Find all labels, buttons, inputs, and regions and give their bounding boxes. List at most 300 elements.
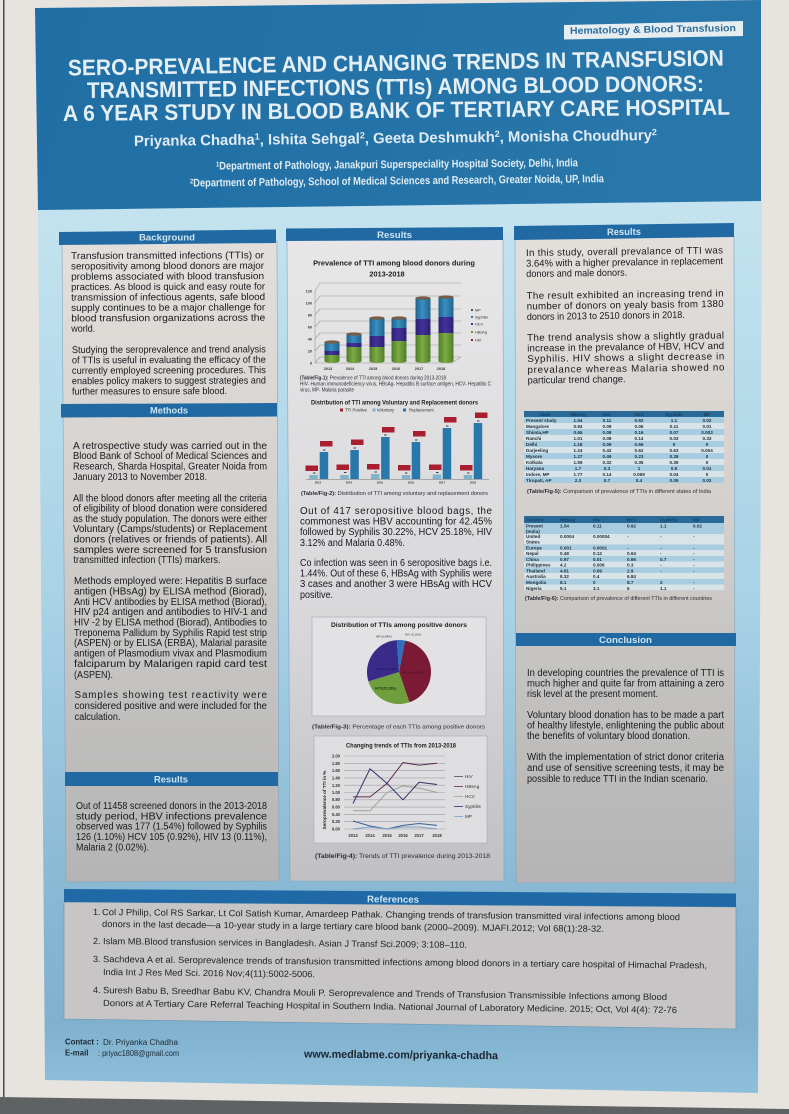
authors: 2 <box>495 129 500 139</box>
value ticks <box>313 420 480 474</box>
methods text: Anti HCV antibodies by ELISA method (Biorad), <box>74 597 267 608</box>
table 1 state names: Shimla,HP <box>526 430 549 435</box>
conclusion text: possible to reduce TTI in the Indian scenario. <box>527 774 708 785</box>
table 1 values: 0.63 <box>670 448 679 453</box>
table 2 rows: - <box>693 568 695 573</box>
table 1 state names <box>526 418 557 483</box>
y axis labels: 60 <box>308 326 312 330</box>
legend <box>340 408 435 413</box>
methods text: (ASPEN). <box>74 670 113 681</box>
table 2 rows: 2 <box>660 580 663 585</box>
table 2 rows: - <box>660 534 662 539</box>
contact details <box>65 1038 179 1058</box>
methods text: falciparum by Malarigen rapid card test <box>74 659 267 670</box>
pie labels <box>375 632 424 690</box>
reference list: 1. <box>93 907 101 917</box>
title: TRANSMITTED INFECTIONS (TTIs) AMONG BLOOD DONORS: <box>87 71 704 103</box>
table 2 rows: 0.11 <box>593 524 602 528</box>
results text left: Out of 11458 screened donors in the 2013-2018 <box>76 801 267 812</box>
legend: Replacement <box>409 408 435 413</box>
table 1 values: 1.54 <box>574 418 583 423</box>
results text left: 126 (1.10%) HCV 105 (0.92%), HIV 13 (0.11%), <box>76 832 267 843</box>
background text: currently employed screening procedures. This <box>72 365 266 377</box>
table 1 values: 0.35 <box>635 460 644 465</box>
table 1 values: 1.59 <box>574 460 583 465</box>
background text: seropositivity among blood donors are major <box>71 261 265 272</box>
results text left <box>76 801 268 853</box>
table 1 values: 0.28 <box>670 454 679 459</box>
table 2 rows: 3.1 <box>593 586 600 591</box>
caption: figure 6: (Table/Fig-6): Comparison of prevalence of different TTIs in different countries <box>525 596 712 602</box>
table 2 rows: Thailand <box>526 568 545 573</box>
chart: stacked prevalence: 2013-2018 <box>369 270 405 278</box>
middle text: 1.44%. Out of these 6, HBsAg with Syphilis were <box>300 568 492 580</box>
table 1 state names: Mangalore <box>526 424 549 429</box>
red value labels <box>306 412 488 471</box>
table 2 header row: HCV <box>627 518 638 522</box>
methods text: donors (relatives or friends of patients). All <box>74 534 267 546</box>
conclusion text: and use of sensitive screening tests, it may be <box>527 763 725 774</box>
methods text: Voluntary (Camps/students) or Replacement <box>73 524 267 535</box>
table 2 rows <box>526 524 702 591</box>
table 1 values: 0.94 <box>574 424 583 429</box>
year labels: 2013 <box>315 480 322 484</box>
table 2 rows: 8.1 <box>560 580 567 585</box>
pie labels: HBsAg (42.45%) <box>402 670 424 674</box>
table 2 rows: States <box>526 540 540 544</box>
results text right: The result exhibited an increasing trend in <box>526 288 724 302</box>
table 2 rows: 0.66 <box>627 557 636 562</box>
caption: figure 5: (Table/Fig-5): Comparison of prevalence of TTIs in different states of India <box>527 489 712 495</box>
background text: practices. As blood is quick and easy route for <box>71 282 266 293</box>
table 2 rows: 8.7 <box>627 580 634 585</box>
background text: enables policy makers to suggest strategies and <box>72 376 266 387</box>
middle text: followed by Syphilis 30.22%, HCV 25.18%, HIV <box>300 527 492 538</box>
line legend: Syphilis <box>465 804 482 809</box>
methods text: of eligibility of blood donation were considered <box>73 504 267 515</box>
replacement bars <box>320 423 482 479</box>
table 2 header row: Country <box>526 518 544 522</box>
background text: problems associated with blood transfusion <box>71 271 264 283</box>
middle text: commonest was HBV accounting for 42.45% <box>300 516 492 528</box>
table 2 header row: HBsAg <box>560 518 576 522</box>
table 2 rows: 0.4 <box>593 574 600 579</box>
methods text: Blood Bank of School of Medical Sciences and <box>73 451 267 462</box>
voluntary bars <box>309 474 472 479</box>
year labels <box>315 480 477 484</box>
chart legend: HBsAg <box>475 330 487 334</box>
authors: , Geeta Deshmukh <box>365 129 495 147</box>
methods text: All the blood donors after meeting all the criteria <box>73 493 268 504</box>
contact details: Contact : <box>65 1038 99 1046</box>
table 1 values: 0.07 <box>670 430 679 435</box>
caption: figure 2: (Table/Fig-2): Distribution of TTI among voluntary and replacement donors <box>301 491 488 497</box>
results text right: donors in 2013 to 2510 donors in 2018. <box>527 310 685 323</box>
table 2 rows: 8.32 <box>560 574 569 579</box>
x labels: 2013 <box>348 833 358 838</box>
table 2 rows: 0.0004 <box>560 534 574 539</box>
table 2 rows: - <box>693 580 695 585</box>
table 1 values: 1.24 <box>574 448 583 453</box>
table 1 values: 0.66 <box>635 442 644 447</box>
table 1 values: 0.03 <box>670 436 679 441</box>
table 1 values: 1 <box>638 466 641 471</box>
heading: results left: Results <box>154 774 188 786</box>
background text: of TTIs is useful in evaluating the efficacy of the <box>72 355 266 366</box>
background text: supply continues to be a major challenge for <box>71 302 266 314</box>
affiliations <box>190 157 605 189</box>
conclusion text: With the implementation of strict donor criteria <box>527 752 725 763</box>
results text right: prevalance whereas Malaria showed no <box>527 362 725 376</box>
table 2 rows: 1.1 <box>660 586 667 591</box>
chart legend: HIV <box>475 338 482 342</box>
heading: methods <box>61 403 277 418</box>
line legend: HIV <box>465 774 474 779</box>
pie slice: HBsAg <box>399 641 431 702</box>
y axis labels: 80 <box>308 314 312 318</box>
y labels <box>332 754 341 832</box>
affiliations: 2 <box>190 178 193 186</box>
table 2 header row: MP <box>693 518 700 522</box>
table 2 rows: 0.48 <box>560 551 569 556</box>
table 2 rows: - <box>693 551 695 556</box>
results text right: In this study, overall prevalance of TTI was <box>526 245 723 259</box>
table 2 rows: 0.64 <box>627 551 636 556</box>
table: countries <box>524 516 724 591</box>
title: A 6 YEAR STUDY IN BLOOD BANK OF TERTIARY CARE HOSPITAL <box>63 95 730 126</box>
table 2 rows: 0.3 <box>627 563 634 568</box>
conclusion text: much higher and quite far from attaining a zero <box>527 678 725 690</box>
results text right: increase in the prevalance of HBV, HCV and <box>527 341 724 354</box>
table 2 rows: 6 <box>627 586 630 591</box>
y axis labels: 40 <box>308 338 312 342</box>
methods text: Samples showing test reactivity were <box>74 690 268 701</box>
heading: results middle: Results <box>377 230 412 241</box>
table 1 values: 0.32 <box>603 460 612 465</box>
category badge: Hematology & Blood Transfusion <box>570 23 736 37</box>
x axis labels: 2013 <box>324 367 332 371</box>
heading: conclusion: Conclusion <box>599 635 652 646</box>
table 2 rows: 0.92 <box>627 524 636 528</box>
affiliations: Department of Pathology, Janakpuri Superspeciality Hospital Society, Delhi, India <box>219 157 579 172</box>
table 2 rows: 4.2 <box>560 563 567 568</box>
methods text: Treponema Pallidum by Syphilis Rapid test strip <box>74 628 268 639</box>
table 1 state names: Darjeeling <box>526 448 548 453</box>
x axis labels <box>324 367 445 371</box>
results text right: 3.64% with a higher prevalance in replacement <box>526 256 723 270</box>
results text left: Malaria 2 (0.02%). <box>76 842 149 853</box>
authors: , Ishita Sehgal <box>260 130 360 149</box>
y labels: 2.00 <box>332 754 341 758</box>
table 1 values <box>574 418 713 483</box>
heading: references: References <box>367 894 419 906</box>
table 1 values: 0 <box>706 442 709 447</box>
table 1 values: 0.39 <box>670 460 679 465</box>
table 2 rows: - <box>627 546 629 550</box>
table 2 rows: 1.1 <box>660 524 667 528</box>
methods text: (ASPEN) or by ELISA (ERBA), Malarial parasite <box>74 638 268 649</box>
table 1 state names: Delhi <box>526 442 537 447</box>
table 1 header row: HCV <box>634 412 645 417</box>
table 1 values: 0.7 <box>604 478 611 483</box>
x labels: 2018 <box>432 833 442 838</box>
panel: left column <box>59 230 279 882</box>
category badge <box>564 21 743 40</box>
table 1 values: 0.08 <box>603 436 612 441</box>
table 2 rows: - <box>693 534 695 539</box>
methods text: January 2013 to November 2018. <box>73 472 207 483</box>
table 1 values: 0 <box>706 454 709 459</box>
table 2 rows: Nepal <box>526 551 539 556</box>
results text left: observed was 177 (1.54%) followed by Syphilis <box>76 822 267 833</box>
methods text: antigen (HBsAg) by ELISA method (Biorad), <box>74 586 267 598</box>
table 1 values: 1.1 <box>671 418 678 423</box>
conclusion text: of healthy lifestyle, enlightening the public about <box>527 721 724 732</box>
year labels: 2016 <box>408 480 415 484</box>
table 1 header row <box>539 412 710 417</box>
grid lines <box>344 756 445 829</box>
table: states of India <box>524 411 724 483</box>
contact details: : priyac1808@gmail.com <box>98 1049 179 1058</box>
caption: figure 3: (Table/Fig-3): Percentage of each TTIs among positive donors <box>312 724 485 730</box>
table 1 values: 2.3 <box>575 478 582 483</box>
legend: TTI Positive <box>345 408 368 413</box>
y labels: 0.00 <box>332 826 341 832</box>
table 2 rows: 0.01 <box>593 557 602 562</box>
table 1 state names: Ranchi <box>526 436 541 441</box>
table 1 values: 0.62 <box>635 448 644 453</box>
chart: line trends: Changing trends of TTIs from 2013-2018 <box>346 742 457 750</box>
results text right: The trend analysis show a slightly gradual <box>527 330 724 344</box>
conclusion text: the benefits of voluntary blood donation. <box>527 731 690 742</box>
photo edge line <box>3 0 4 1098</box>
table 1 values: 0.003 <box>701 430 713 435</box>
caption: figure 4: (Table/Fig-4): Trends of TTI prevalence during 2013-2018 <box>315 853 490 860</box>
reference list: India Int J Res Med Sci. 2016 Nov;4(11):5002-5006. <box>103 967 315 979</box>
table 1 values: 1.01 <box>574 436 583 441</box>
conclusion text: In developing countries the prevalence of TTI is <box>527 668 724 679</box>
methods text: samples were screened for 5 transfusion <box>74 545 267 556</box>
table 2 rows: 0.69 <box>593 568 602 573</box>
table 2 rows: 0.7 <box>660 557 667 562</box>
contact details: Dr. Priyanka Chadha <box>103 1038 179 1047</box>
table 2 rows: 0.02 <box>693 524 702 528</box>
pie labels: HIV (3.12%) <box>405 632 421 636</box>
line legend: HCV <box>465 794 476 799</box>
table 1 values: 0.05 <box>670 478 679 483</box>
methods text: transmitted infection (TTIs) markers. <box>74 555 220 566</box>
series lines <box>353 763 437 829</box>
table 1 values: 0 <box>706 460 709 465</box>
reference list: 3. <box>93 954 101 964</box>
website: www.medlabme.com/priyanka-chadha <box>303 1048 499 1062</box>
table 1 values: 0.11 <box>603 418 612 423</box>
table 2 rows: - <box>693 557 695 562</box>
y axis labels <box>306 290 312 366</box>
table 1 values: 0.14 <box>603 472 612 477</box>
y labels: 0.20 <box>332 819 341 824</box>
methods text: antigen of Plasmodium vivax and Plasmodium <box>74 649 267 660</box>
table 2 rows: 0.00004 <box>593 534 610 539</box>
authors: 2 <box>360 130 365 140</box>
reference list: Suresh Babu B, Sreedhar Babu KV, Chandra Mouli P. Seroprevalence and Trends of Transfusion Transmissible Infections among Blood <box>103 985 667 1002</box>
y labels: 0.40 <box>332 812 341 817</box>
table 1 state names: Tirupati, AP <box>526 478 552 483</box>
y labels: 0.60 <box>332 804 341 810</box>
middle text <box>300 506 493 601</box>
table 1 values: 0.004 <box>701 448 713 453</box>
pie labels: MP (0.48%) <box>376 634 392 638</box>
table 1 header row: Syphilis <box>665 412 683 417</box>
heading: methods: Methods <box>150 406 188 416</box>
table 1 values: 0.11 <box>670 424 679 429</box>
heading: results right <box>514 223 734 240</box>
results text right: number of donors on yealy basis from 1380 <box>527 299 724 312</box>
y labels: 1.80 <box>332 761 341 766</box>
reference list: donors in the last decade—a 10-year study in a large tertiary care blood bank (2000–2009). MJAFI.2012; Vol 68(1):28-32. <box>102 919 604 934</box>
table 2 rows: Mongolia <box>526 580 547 585</box>
authors: 2 <box>652 127 657 137</box>
table 2 rows: 0.001 <box>560 546 572 550</box>
table 1 state names: Mysore <box>526 454 543 459</box>
table 1 values: 1.18 <box>574 442 583 447</box>
background text: Transfusion transmitted infections (TTIs) or <box>71 250 265 262</box>
results text right: donors and male donors. <box>526 268 627 280</box>
table 1 values: 0.09 <box>603 442 612 447</box>
table 2 rows: Australia <box>526 574 546 579</box>
table 2 rows: United <box>526 534 540 539</box>
table 2 rows: 0.0001 <box>593 546 607 550</box>
y labels: 1.20 <box>332 783 341 788</box>
methods text: as the study population. The donors were either <box>73 514 268 525</box>
year labels: 2014 <box>346 480 353 484</box>
heading: background <box>59 230 276 245</box>
heading: references <box>64 889 736 907</box>
y labels: 0.80 <box>332 797 341 802</box>
x labels: 2016 <box>398 833 408 838</box>
table 1 values: 0.14 <box>635 436 644 441</box>
line legend: HBsAg <box>465 784 480 789</box>
heading: results left <box>65 772 278 786</box>
pie slice: HCV <box>368 672 409 704</box>
y axis labels: 20 <box>308 350 312 354</box>
table 1 values: 0.65 <box>574 430 583 435</box>
table 2 rows: - <box>660 563 662 568</box>
methods text: calculation. <box>74 712 120 723</box>
table 1 values: 0.01 <box>703 466 712 471</box>
chart: voluntary and replacement <box>306 400 489 484</box>
chart legend: MP <box>475 308 481 312</box>
table 1 values: 0.08 <box>603 430 612 435</box>
methods text: HIV p24 antigen and antibodies to HIV-1 and <box>74 607 267 618</box>
panel: right column <box>514 223 736 883</box>
table 1 values: 0.49 <box>603 454 612 459</box>
table 1 values: 0 <box>673 442 676 447</box>
chart: pie <box>312 617 486 716</box>
table 1 state names: Present study <box>526 418 557 423</box>
middle text: positive. <box>300 590 333 601</box>
table 2 rows: - <box>693 563 695 568</box>
table 2 header row: HIV <box>593 518 602 522</box>
panel: references <box>64 889 736 1029</box>
floor <box>0 1097 789 1114</box>
table 1 header row: MP <box>704 412 710 417</box>
background text: transmission of infectious agents, safe blood <box>71 292 265 304</box>
x axis labels: 2017 <box>415 367 423 371</box>
pie slice: Syphilis <box>367 640 399 681</box>
table 2 rows: 0.12 <box>593 551 602 556</box>
methods text: Methods employed were: Hepatitis B surface <box>74 576 268 587</box>
caption: figure 1: HIV- Human immunodeficiency virus, HBsAg- Hepatitis B surface antigen, HCV- Hepatitis C <box>300 382 491 388</box>
y axis labels: 0 <box>310 362 312 366</box>
caption: figure 1: virus, MP- Malaria parasite <box>300 388 354 394</box>
chart: stacked prevalence: Prevalence of TTI among blood donors during <box>313 258 475 268</box>
table 2 header row <box>526 518 700 522</box>
table 2 rows: 1.54 <box>560 524 569 528</box>
table 2 rows: - <box>693 586 695 591</box>
y labels: 1.60 <box>332 768 341 773</box>
results text right: Syphilis. HIV shows a slight decrease in <box>527 351 724 365</box>
reference list <box>93 907 707 1015</box>
table 1 state names: Indore, MP <box>526 472 549 477</box>
table 2 rows: 4.61 <box>560 568 569 573</box>
table 1 values: 0.92 <box>635 418 644 423</box>
x axis labels: 2014 <box>346 367 355 371</box>
year labels: 2017 <box>439 480 446 484</box>
line legend: MP <box>465 814 472 819</box>
heading: results right: Results <box>607 227 641 238</box>
heading: results middle <box>286 227 503 241</box>
table 1 values: 0.3 <box>604 466 611 471</box>
table 2 rows: China <box>526 557 539 562</box>
y labels: 1.00 <box>332 790 341 795</box>
contact details: E-mail <box>65 1048 88 1058</box>
x axis labels: 2015 <box>369 367 377 371</box>
background text: further measures to ensure safe blood. <box>72 386 227 398</box>
x axis labels: 2018 <box>437 367 445 371</box>
table 1 values: 1.27 <box>574 454 583 459</box>
table 1 values: 0.42 <box>603 448 612 453</box>
table 2 rows: 9.1 <box>560 586 567 591</box>
table 1 values: 1.77 <box>574 472 583 477</box>
table 2 rows: - <box>660 568 662 573</box>
conclusion text <box>527 668 725 785</box>
year labels: 2018 <box>470 480 477 484</box>
title: SERO-PREVALENCE AND CHANGING TRENDS IN TRANSFUSION <box>68 46 724 80</box>
pie labels: HCV(25.18%) <box>375 686 396 690</box>
affiliations: 1 <box>216 161 219 169</box>
y labels: 1.40 <box>332 776 341 780</box>
background text: blood transfusion organizations across the <box>71 313 266 324</box>
table 2 rows: 0 <box>593 580 596 585</box>
x labels: 2014 <box>365 833 375 838</box>
reference list: Donors at A Tertiary Care Referral Teaching Hospital in Southern India. National Journal of Laboratory Medicine. 2015; Oct, Vol 4(4): 72-76 <box>103 998 677 1015</box>
table 2 rows: 0.006 <box>593 563 605 568</box>
table 1 values: 0 <box>706 472 709 477</box>
methods text <box>73 441 268 723</box>
conclusion text: Voluntary blood donation has to be made a part <box>527 710 724 721</box>
table 2 rows: (India) <box>526 529 540 534</box>
authors: Priyanka Chadha <box>134 132 256 150</box>
caption: figure 1 <box>300 376 491 394</box>
pie slice: HIV <box>397 640 405 672</box>
table 2 rows: - <box>660 551 662 556</box>
chart legend: HCV <box>475 322 483 326</box>
methods text: HIV -2 by ELISA method (Biorad), Antibodies to <box>74 618 268 628</box>
table 1 state names: Kolkata <box>526 460 543 465</box>
table 1 values: 0.9 <box>671 466 678 471</box>
reference list: 4. <box>93 985 101 995</box>
